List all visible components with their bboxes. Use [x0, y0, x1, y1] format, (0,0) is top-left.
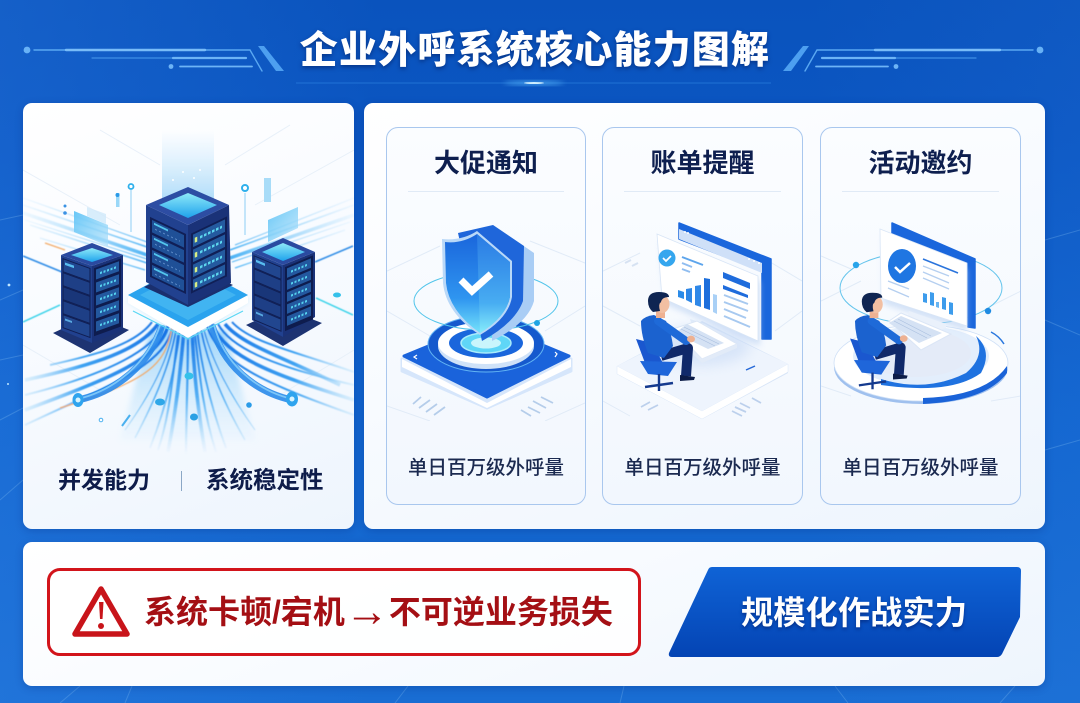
card: bill reminder — [602, 127, 803, 505]
right tube — [212, 325, 292, 400]
keyboard — [889, 313, 951, 350]
title underline glow — [296, 80, 771, 86]
panel: left servers — [23, 103, 354, 529]
right strands — [207, 322, 354, 415]
icon: shield on platform — [387, 225, 585, 421]
keyboard — [673, 321, 737, 359]
person — [636, 292, 695, 391]
central server — [144, 187, 233, 307]
left server — [53, 243, 129, 353]
divider — [181, 471, 182, 491]
streaks — [23, 198, 354, 322]
central platform — [128, 263, 248, 339]
button: scale capability — [668, 567, 1021, 657]
pins — [63, 169, 271, 235]
button label: 规模化作战实力 — [741, 595, 967, 631]
card: event invitation — [820, 127, 1021, 505]
title decoration: left lines — [24, 46, 284, 72]
title: 企业外呼系统核心能力图解 — [300, 30, 770, 72]
title decoration: right lines — [783, 46, 1044, 72]
person — [850, 293, 908, 389]
card caption: 单日百万级外呼量 — [624, 457, 780, 479]
left tube — [78, 325, 162, 400]
icon: agent at dashboard — [603, 222, 802, 419]
monitor — [892, 223, 975, 328]
panel: scenarios — [364, 103, 1045, 529]
floating screens — [87, 207, 106, 224]
left strands — [25, 322, 172, 425]
card caption: 单日百万级外呼量 — [842, 457, 998, 479]
warning text: 系统卡顿/宕机→不可逆业务损失 — [144, 587, 613, 636]
center fan — [120, 330, 255, 440]
illustration: server cluster — [23, 124, 354, 450]
card title: 大促通知 — [434, 148, 538, 178]
callout: risk warning — [47, 568, 641, 656]
beads — [184, 372, 194, 380]
card title: 账单提醒 — [650, 148, 754, 178]
icon: agent on disc — [821, 222, 1020, 404]
card title: 活动邀约 — [868, 148, 972, 178]
label: system stability: 系统稳定性 — [206, 467, 324, 493]
monitor — [679, 223, 771, 339]
right server — [246, 238, 322, 346]
label: concurrency: 并发能力 — [58, 467, 150, 493]
icon: warning triangle — [72, 586, 130, 637]
panel: bottom banner — [23, 542, 1045, 686]
card caption: 单日百万级外呼量 — [408, 457, 564, 479]
card: promotion notice — [386, 127, 586, 505]
